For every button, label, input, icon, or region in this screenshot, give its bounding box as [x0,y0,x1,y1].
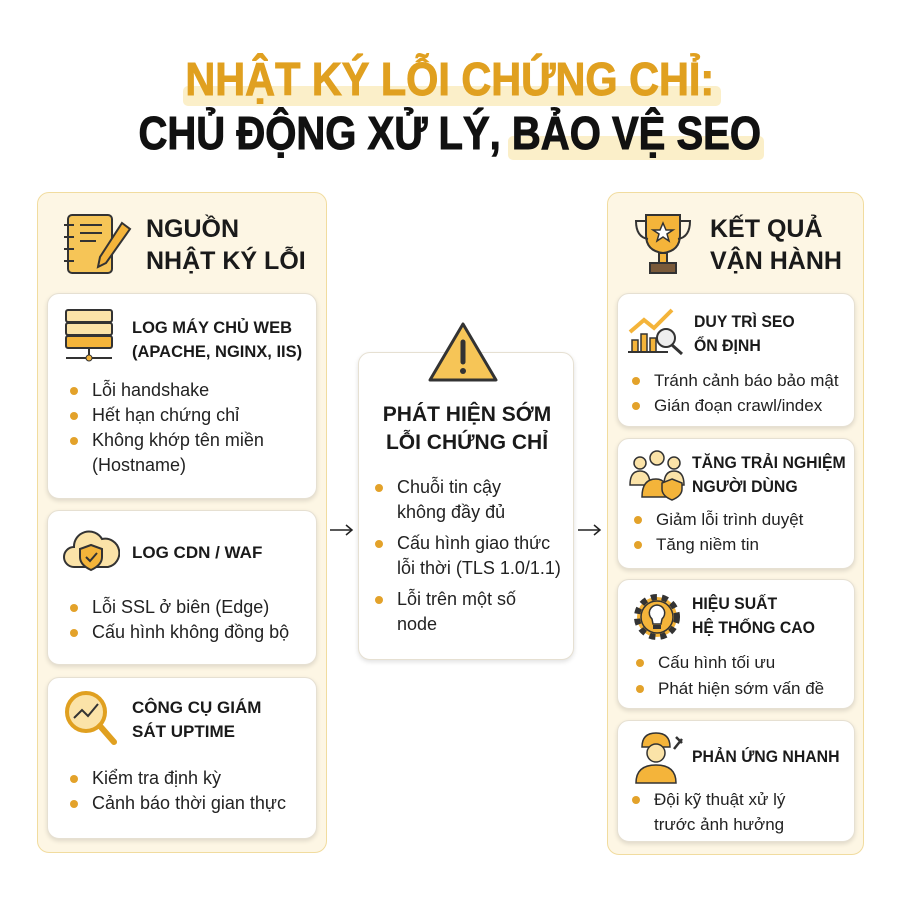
heading: SÁT UPTIME [132,722,235,741]
bullets: Hết hạn chứng chỉ [92,405,239,425]
arrow: left to middle [330,524,354,536]
panel: results [607,192,864,855]
icon: engineer [635,732,683,784]
heading: results [710,214,842,275]
bullets [636,653,824,698]
title line 1: NHẬT KÝ LỖI CHỨNG CHỈ: [186,53,714,105]
heading: sources: NHẬT KÝ LỖI [146,247,306,275]
icon: notebook [64,214,132,274]
bullets [632,790,786,834]
icon: warning triangle [428,322,498,382]
bullets: Phát hiện sớm vấn đề [658,679,824,698]
bullets: trước ảnh hưởng [654,815,784,834]
card: middle detection [358,352,574,660]
bullets: không đầy đủ [397,502,505,522]
bullets: lỗi thời (TLS 1.0/1.1) [397,558,561,578]
heading: (APACHE, NGINX, IIS) [132,342,302,361]
heading: results: KẾT QUẢ [710,215,822,243]
heading: ỔN ĐỊNH [694,336,761,355]
heading: LOG CDN / WAF [132,543,262,562]
bullets: Cấu hình tối ưu [658,653,775,672]
heading [383,402,551,454]
card: UX [617,438,855,569]
arrow: middle to right [578,524,602,536]
heading: CÔNG CỤ GIÁM [132,698,261,717]
bullets [70,380,264,475]
heading: HỆ THỐNG CAO [692,618,815,637]
bullets: Không khớp tên miền [92,430,264,450]
heading [132,318,302,361]
bullets: Tăng niềm tin [656,535,759,554]
title line 2: CHỦ ĐỘNG XỬ LÝ, BẢO VỆ SEO [139,107,761,159]
icon: chart magnifier [628,308,683,355]
heading: results: VẬN HÀNH [710,247,842,275]
bullets [375,476,561,634]
icon: cloud shield [63,530,120,572]
bullets: Lỗi SSL ở biên (Edge) [92,597,269,617]
card: web server log [47,293,317,499]
heading: TĂNG TRẢI NGHIỆM [692,453,846,472]
heading: DUY TRÌ SEO [694,312,795,331]
bullets: Lỗi trên một số [397,589,516,609]
card: fast response [617,720,855,842]
bullets: Đội kỹ thuật xử lý [654,790,785,809]
bullets: Chuỗi tin cậy [397,477,501,497]
icon: people shield [629,450,685,501]
bullets: Cảnh báo thời gian thực [92,793,286,813]
bullets: Gián đoạn crawl/index [654,396,822,415]
heading: NGƯỜI DÙNG [692,477,798,496]
bullets: Giảm lỗi trình duyệt [656,510,803,529]
icon: magnifier chart [65,691,117,745]
bullets [70,768,286,813]
heading: LỖI CHỨNG CHỈ [386,431,548,454]
heading [692,594,815,637]
card: CDN/WAF log [47,510,317,665]
panel: sources [37,192,327,853]
bullets [632,371,839,415]
card: performance [617,579,855,709]
bullets: (Hostname) [92,455,186,475]
bullets: Cấu hình không đồng bộ [92,622,289,642]
bullets [70,596,289,642]
heading: sources: NGUỒN [146,215,239,243]
icon: server [65,309,113,362]
heading [694,312,795,355]
bullets: Cấu hình giao thức [397,533,550,553]
bullets: Lỗi handshake [92,380,209,400]
icon: gear bulb [634,594,680,640]
heading: PHẢN ỨNG NHANH [692,747,840,766]
bullets: Tránh cảnh báo bảo mật [654,371,839,390]
bullets: Kiểm tra định kỳ [92,768,221,788]
card: SEO [617,293,855,427]
heading [132,698,261,741]
heading: LOG MÁY CHỦ WEB [132,318,292,337]
heading: sources [146,214,306,275]
heading [692,453,846,496]
bullets: node [397,614,437,634]
icon: trophy [635,214,691,274]
bullets [634,510,804,554]
heading: PHÁT HIỆN SỚM [383,403,551,426]
card: uptime tools [47,677,317,839]
heading: HIỆU SUẤT [692,594,777,613]
